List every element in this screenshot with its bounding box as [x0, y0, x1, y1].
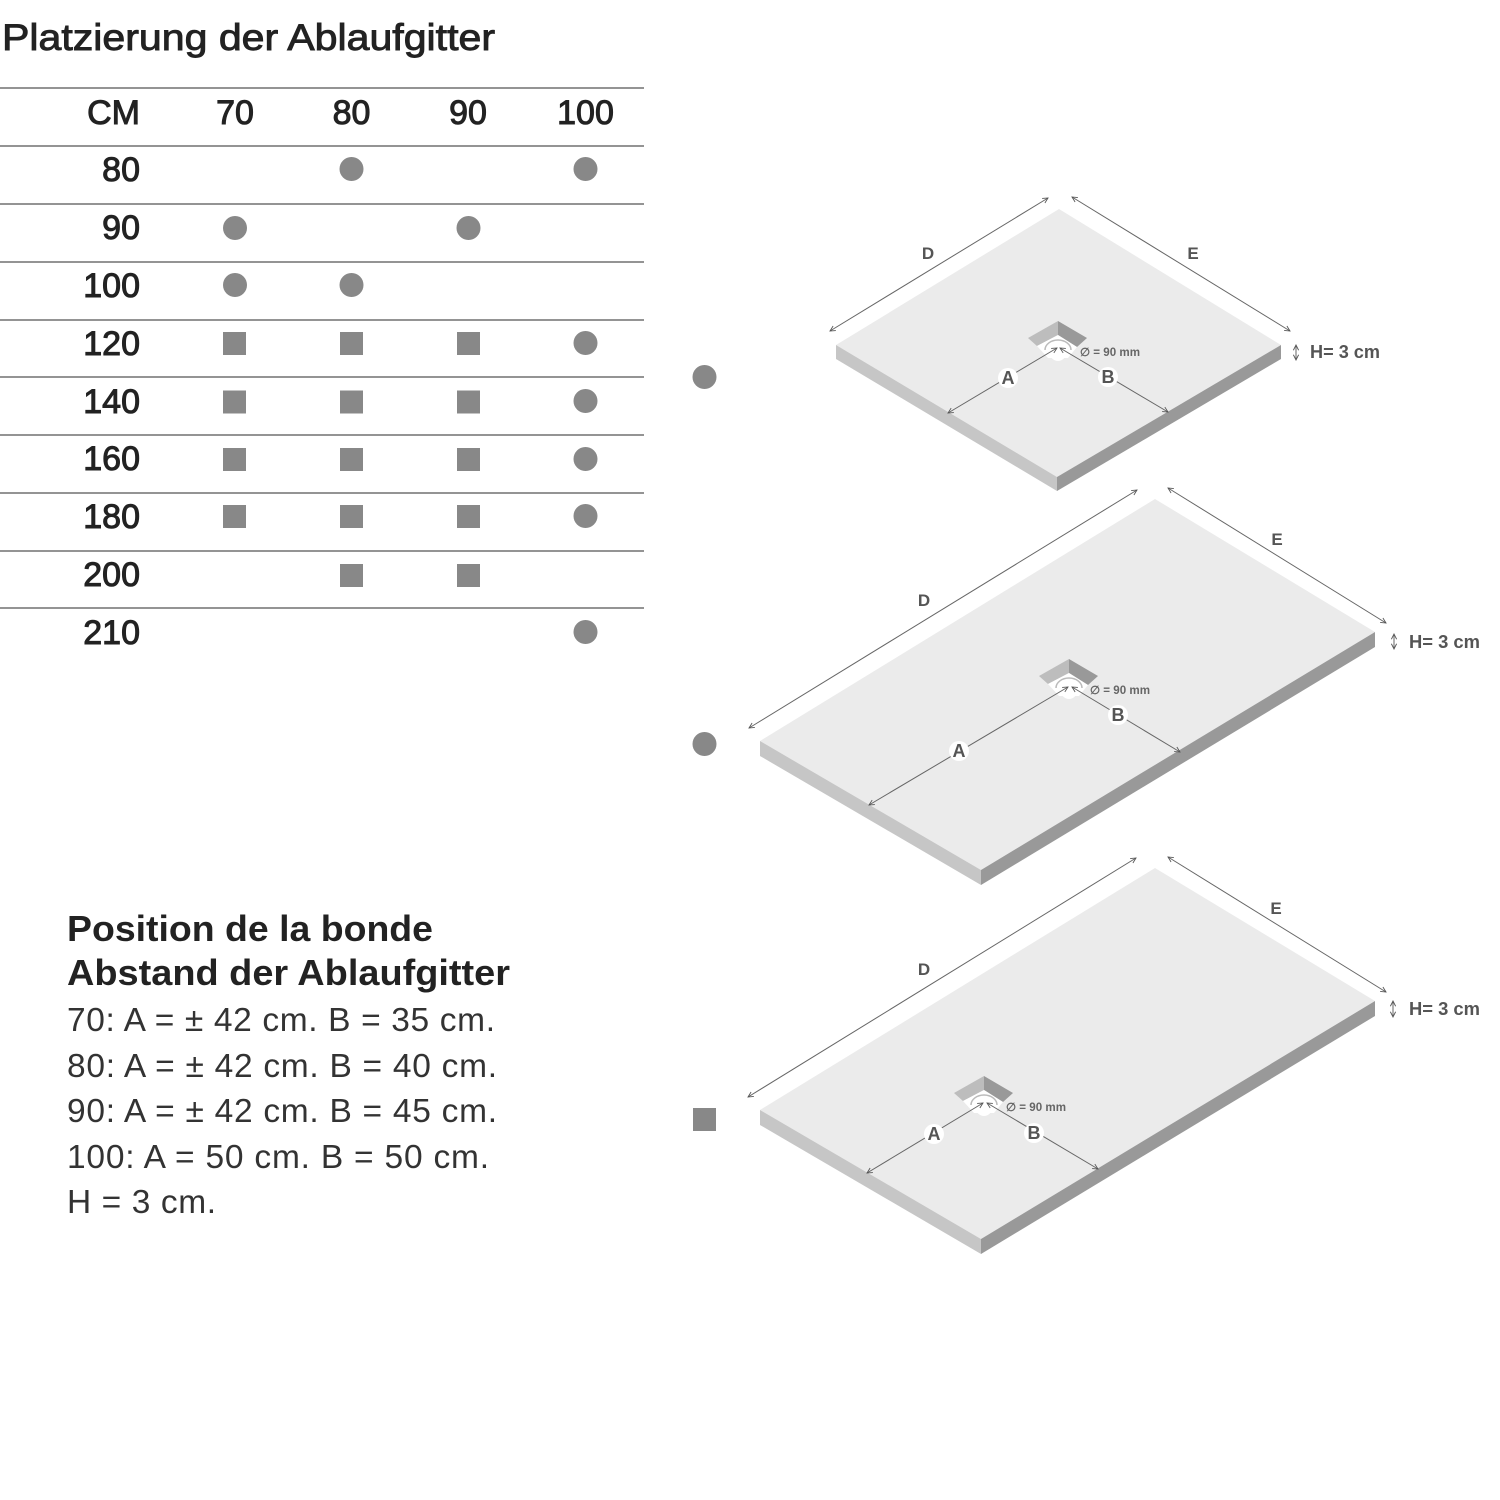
row 90 — [102, 209, 480, 247]
dimension A — [867, 1103, 983, 1173]
table header row: 80 — [333, 94, 370, 132]
dimension B — [1072, 687, 1180, 752]
legend symbol: circle, plate 2 — [692, 732, 716, 756]
table header row: 90 — [449, 94, 487, 132]
text block: drain distances — [67, 908, 510, 1221]
drain diameter label: ∅ = 90 mm — [1090, 685, 1150, 697]
dimension D: D — [918, 960, 930, 979]
legend symbol: circle, plate 1 — [692, 365, 716, 389]
row 210: 210 — [83, 614, 140, 652]
dimension A: A — [952, 741, 966, 761]
dimension B: B — [1112, 705, 1124, 725]
drain diameter label: ∅ = 90 mm — [1080, 347, 1140, 359]
dimension E — [1072, 197, 1290, 331]
diagram: long shower tray, centered drain — [749, 488, 1480, 885]
row 160 — [83, 440, 598, 478]
legend symbol: square, plate 3 — [693, 1108, 716, 1131]
tray body — [836, 209, 1281, 491]
row 180 — [83, 498, 598, 536]
table header row: CM — [87, 94, 140, 132]
drain — [1039, 659, 1098, 699]
dimension D — [749, 490, 1137, 728]
drain — [954, 1076, 1013, 1116]
dimension E — [1168, 488, 1386, 623]
diagram: long shower tray, offset drain — [748, 857, 1480, 1254]
drain — [1028, 321, 1087, 361]
row 100: 100 — [83, 267, 140, 305]
dimension E: E — [1271, 530, 1283, 549]
dimension D: D — [918, 591, 930, 610]
dimension D — [830, 198, 1048, 331]
dimension B: B — [1028, 1123, 1040, 1143]
row 120: 120 — [83, 325, 140, 363]
row 140 — [83, 383, 598, 421]
title: Platzierung der Ablaufgitter — [2, 17, 495, 58]
row 80: 80 — [102, 151, 140, 189]
diagram: small shower tray — [830, 197, 1380, 491]
distances list: 80: A = ± 42 cm. B = 40 cm. — [67, 1048, 497, 1085]
row 100 — [83, 267, 364, 305]
table header row — [87, 94, 614, 132]
row 120 — [83, 325, 598, 363]
row 180: 180 — [83, 498, 140, 536]
row 140: 140 — [83, 383, 140, 421]
dimension A — [869, 687, 1068, 805]
tray body — [760, 499, 1375, 885]
tray body — [760, 868, 1375, 1254]
height label: H= 3 cm — [1409, 632, 1480, 652]
dimension E: E — [1270, 899, 1282, 918]
heading: position de la bonde: Position de la bonde — [67, 908, 433, 949]
height label: H= 3 cm — [1310, 342, 1380, 362]
distances list: 100: A = 50 cm. B = 50 cm. — [67, 1139, 489, 1176]
row 90: 90 — [102, 209, 140, 247]
table header row: 70 — [216, 94, 254, 132]
row 80 — [102, 151, 598, 189]
table header row: 100 — [557, 94, 614, 132]
dimension D — [748, 858, 1136, 1097]
distances list — [67, 1002, 497, 1221]
row 200 — [83, 556, 480, 594]
dimension B — [1060, 348, 1168, 412]
dimension B — [987, 1103, 1098, 1169]
row 200: 200 — [83, 556, 140, 594]
drain diameter label: ∅ = 90 mm — [1006, 1102, 1066, 1114]
distances list: 90: A = ± 42 cm. B = 45 cm. — [67, 1093, 497, 1130]
dimension E — [1168, 857, 1386, 992]
dimension A — [948, 348, 1057, 413]
row 160: 160 — [83, 440, 140, 478]
dimension A: A — [928, 1124, 940, 1144]
distances list: 70: A = ± 42 cm. B = 35 cm. — [67, 1002, 495, 1039]
height label: H= 3 cm — [1409, 999, 1480, 1019]
row 210 — [83, 614, 598, 652]
dimension B: B — [1102, 367, 1114, 387]
table: drain placement by size — [0, 88, 644, 652]
heading: Abstand der Ablaufgitter: Abstand der Ablaufgitter — [67, 952, 510, 993]
dimension A: A — [1002, 368, 1014, 388]
dimension E: E — [1187, 244, 1199, 263]
distances list: H = 3 cm. — [67, 1184, 216, 1221]
dimension D: D — [922, 244, 934, 263]
